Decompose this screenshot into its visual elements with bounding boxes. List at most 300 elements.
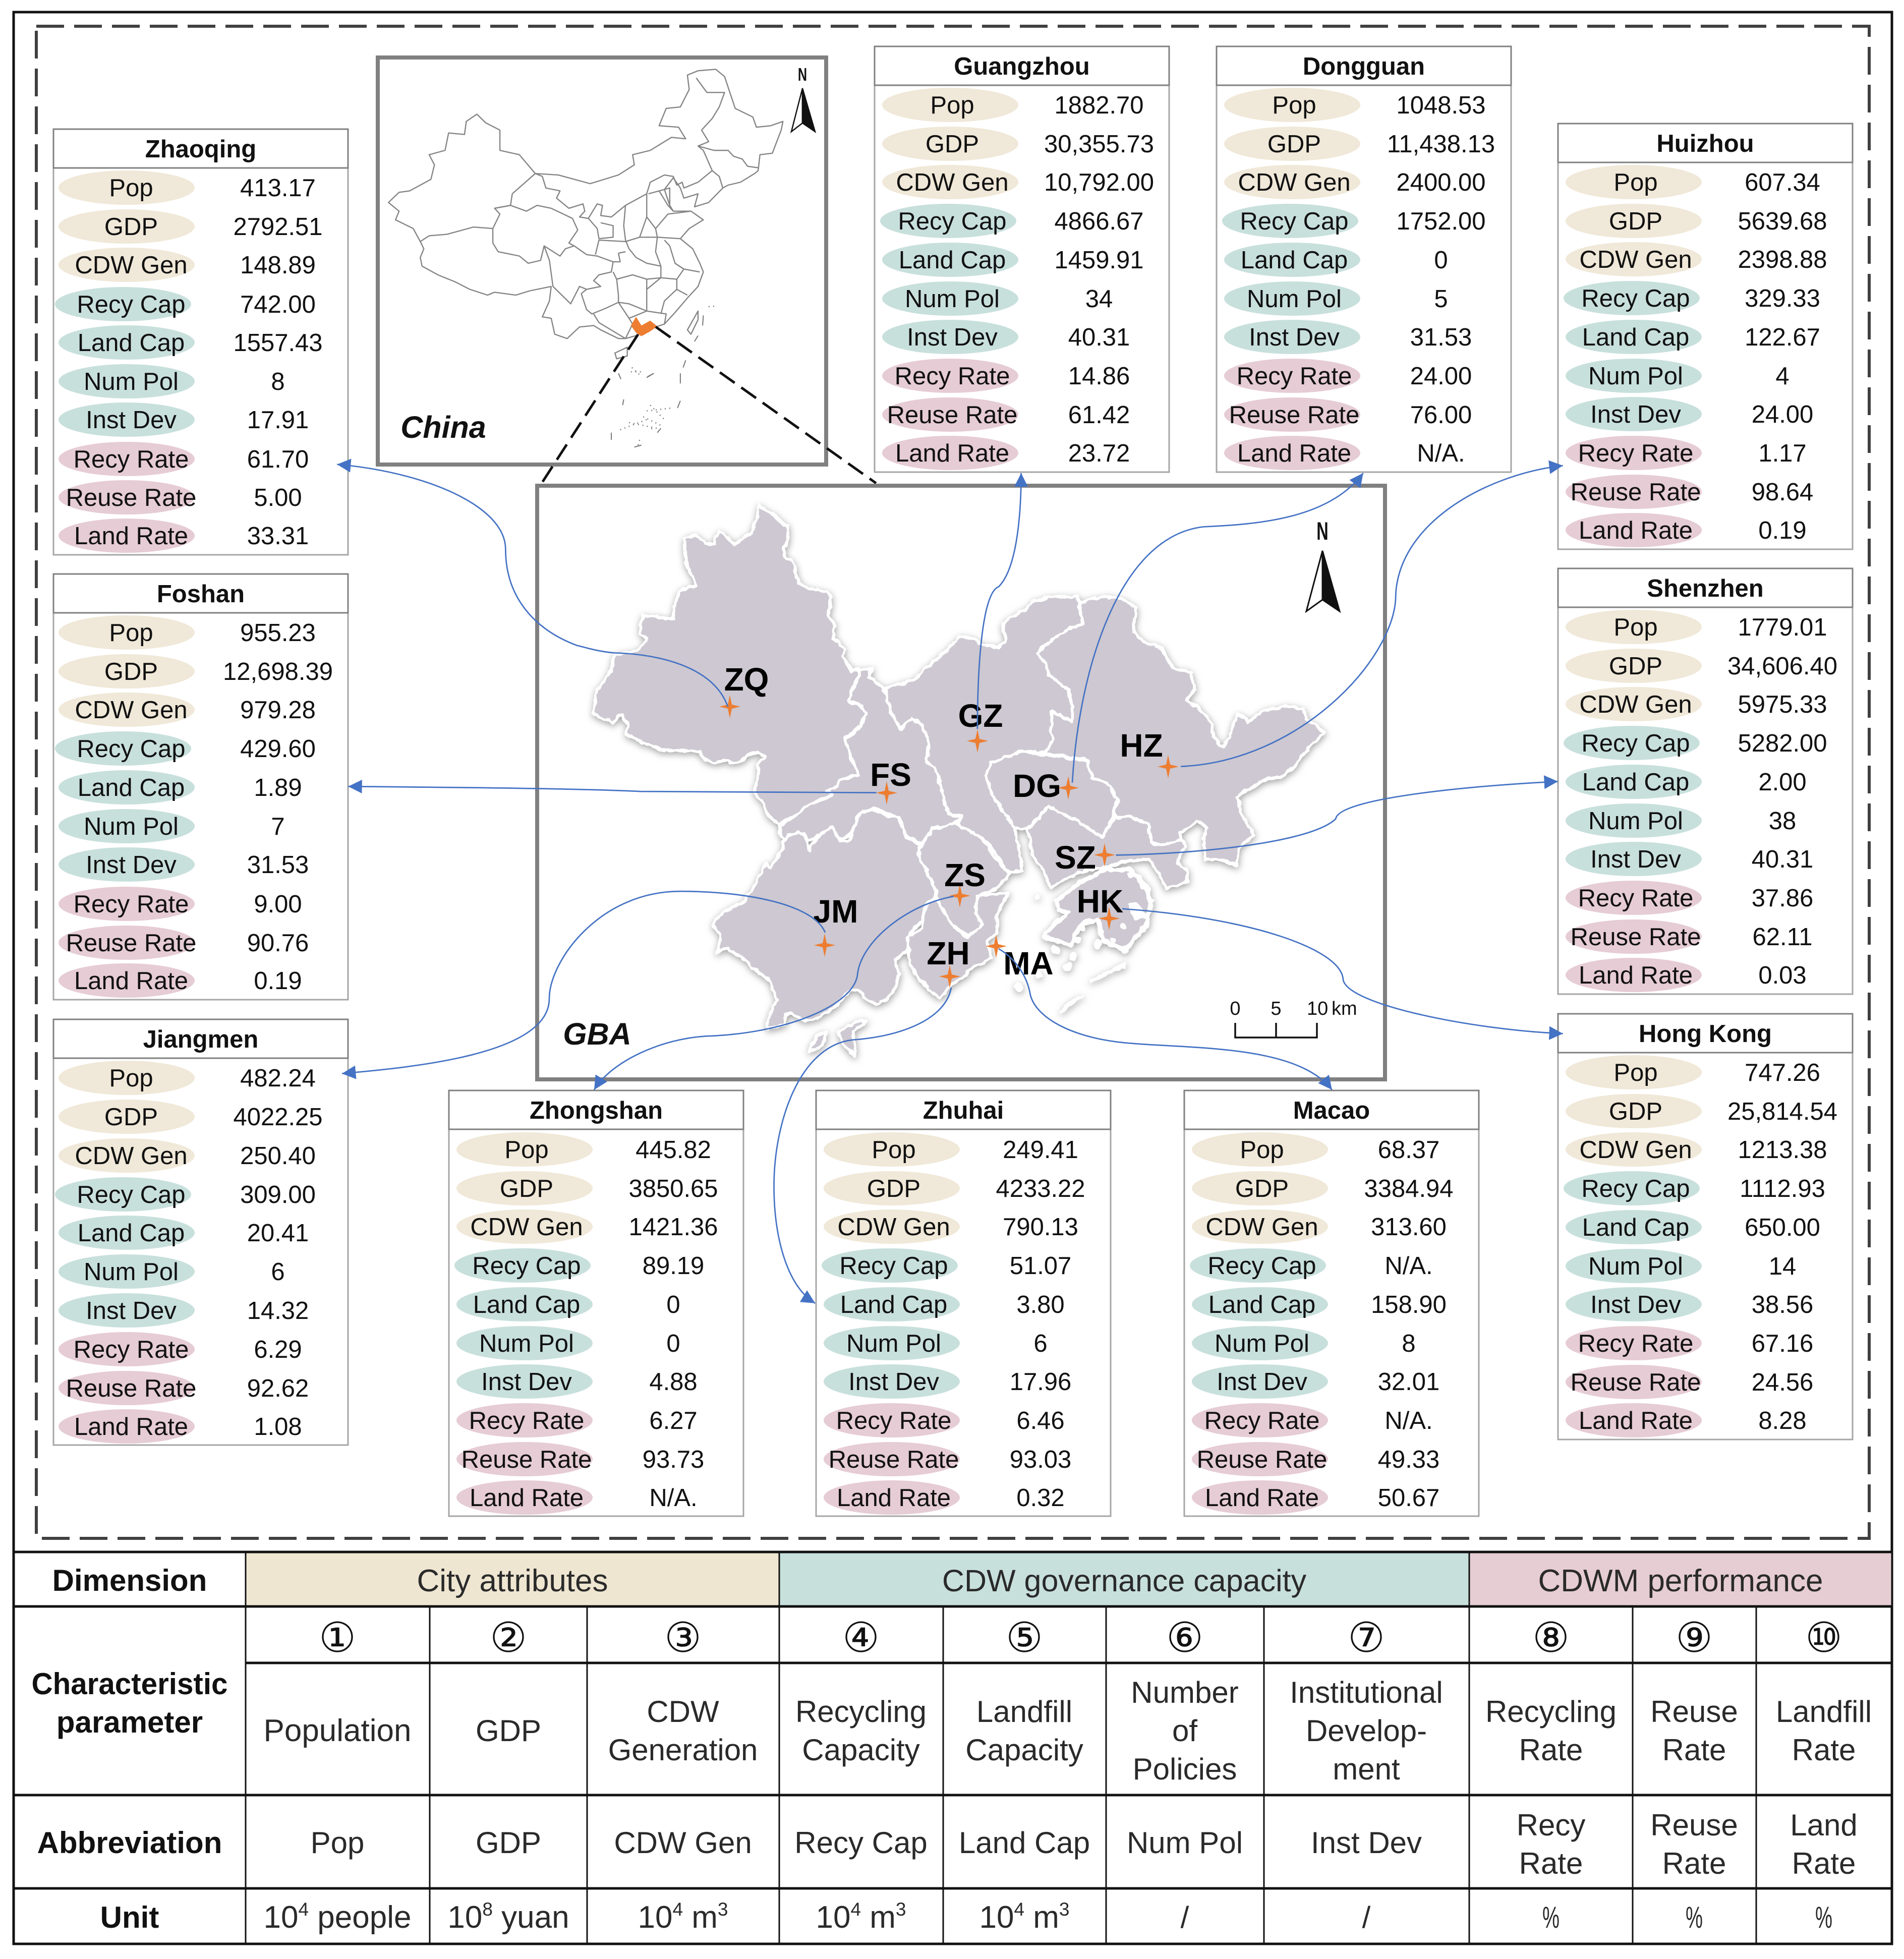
city code labels: SZ — [1055, 839, 1096, 876]
row: CDW Gen — [59, 693, 316, 727]
icon: north arrow (GBA): N — [1316, 517, 1329, 545]
city code labels: ZH — [927, 935, 970, 971]
heading: Hong Kong: Hong Kong — [1639, 1020, 1772, 1048]
row: Land Cap: Land Cap — [1241, 247, 1348, 274]
row: Inst Dev: 32.01 — [1378, 1368, 1439, 1396]
row: Recy Rate: Recy Rate — [469, 1407, 584, 1434]
city code labels — [724, 661, 1163, 982]
row: CDW Gen: CDW Gen — [75, 1142, 188, 1170]
heading: Shenzhen — [1558, 568, 1853, 607]
panel: China inset map — [378, 57, 826, 465]
row: Num Pol: 4 — [1775, 363, 1790, 390]
units — [264, 1899, 1832, 1935]
row: Inst Dev: 14.32 — [247, 1297, 309, 1324]
row: GDP: GDP — [1235, 1175, 1289, 1202]
row: Recy Rate: Recy Rate — [1578, 1330, 1693, 1357]
zoom-in dashed connector lines — [541, 327, 876, 485]
row: Inst Dev: 24.00 — [1752, 401, 1813, 428]
units: / — [1181, 1900, 1189, 1934]
row: GDP: GDP — [1609, 1098, 1662, 1125]
row: Reuse Rate: 62.11 — [1753, 924, 1812, 951]
row: Inst Dev: 38.56 — [1752, 1291, 1813, 1318]
row: Reuse Rate: 93.03 — [1010, 1446, 1071, 1473]
parameter names: Recycling — [1485, 1695, 1617, 1728]
row: Pop: Pop — [1240, 1136, 1284, 1164]
row: Recy Rate — [1566, 1326, 1813, 1360]
row: GDP — [456, 1171, 718, 1205]
row: Inst Dev: 17.96 — [1010, 1368, 1071, 1396]
row: Land Rate — [1192, 1480, 1439, 1515]
heading: Shenzhen: Shenzhen — [1647, 575, 1764, 602]
arrow: Guangzhou — [977, 473, 1021, 729]
row: Recy Cap: 4866.67 — [1054, 208, 1144, 235]
heading: Macao: Macao — [1293, 1097, 1370, 1124]
row: GDP: 34,606.40 — [1727, 653, 1837, 680]
region: Zhongshan — [918, 824, 1010, 937]
abbreviations: GDP — [476, 1826, 541, 1860]
parameter names: Rate — [1662, 1733, 1726, 1767]
units: 10 — [979, 1900, 1014, 1935]
row: CDW Gen: CDW Gen — [1205, 1214, 1318, 1241]
row: GDP: 11,438.13 — [1387, 131, 1495, 158]
row: Land Rate: N/A. — [649, 1484, 698, 1512]
row: GDP: GDP — [867, 1175, 920, 1202]
abbreviations: Reuse — [1650, 1808, 1738, 1842]
row: Reuse Rate: 61.42 — [1068, 401, 1130, 429]
row: CDW Gen: 2398.88 — [1738, 246, 1827, 273]
row: GDP: 4233.22 — [996, 1175, 1085, 1202]
abbreviations: Land Cap — [959, 1826, 1090, 1860]
row: Recy Rate — [1192, 1403, 1433, 1437]
row: Num Pol: Num Pol — [846, 1330, 941, 1357]
row: Land Rate: 0.19 — [254, 967, 302, 995]
row: Land Cap: 1459.91 — [1054, 247, 1144, 274]
heading: Zhaoqing — [53, 129, 348, 168]
row: GDP: GDP — [1609, 653, 1662, 680]
row: Land Rate: 33.31 — [247, 523, 309, 550]
row: Pop: Pop — [1613, 1059, 1658, 1086]
scale bar: 0 — [1230, 998, 1241, 1019]
region: Dongguan — [986, 751, 1118, 837]
parameter names: ment — [1333, 1752, 1400, 1786]
units: m — [683, 1900, 718, 1935]
region: Huizhou — [1038, 597, 1325, 866]
row: Land Rate: Land Rate — [74, 523, 188, 550]
row: Inst Dev — [1566, 842, 1813, 876]
parameter names — [263, 1676, 1872, 1786]
row: Land Cap: 650.00 — [1745, 1214, 1820, 1241]
row: CDW Gen — [1192, 1209, 1447, 1244]
row: Recy Rate: 14.86 — [1068, 363, 1130, 390]
parameter names: Reuse — [1650, 1695, 1738, 1728]
row: Reuse Rate: 5.00 — [254, 484, 302, 511]
row: Land Rate: 0.32 — [1016, 1484, 1065, 1512]
row: Recy Cap: N/A. — [1384, 1252, 1433, 1280]
panel: Zhaoqing table — [53, 129, 348, 555]
row: GDP — [59, 1100, 323, 1134]
row: Num Pol — [1566, 803, 1796, 838]
row: Inst Dev — [59, 847, 309, 882]
row: Recy Rate: Recy Rate — [74, 1336, 189, 1363]
row: Land Rate: N/A. — [1417, 440, 1465, 467]
row: Reuse Rate: 98.64 — [1752, 479, 1813, 506]
row: Inst Dev: Inst Dev — [1590, 401, 1681, 428]
row: Land Cap: 20.41 — [247, 1220, 309, 1247]
row: Pop: 445.82 — [636, 1136, 711, 1164]
row: CDW Gen: CDW Gen — [1238, 169, 1351, 196]
row: Reuse Rate — [1224, 397, 1472, 432]
row: Land Rate: 8.28 — [1758, 1407, 1807, 1434]
row: Recy Cap: Recy Cap — [77, 291, 186, 318]
abbreviations: Recy — [1517, 1808, 1585, 1842]
row: Pop: Pop — [1613, 169, 1658, 196]
units: 8 — [482, 1899, 493, 1920]
row: Num Pol — [824, 1326, 1048, 1360]
heading: Huizhou — [1558, 124, 1853, 162]
row: GDP: 30,355.73 — [1044, 131, 1154, 158]
row: Reuse Rate — [1566, 475, 1813, 509]
row: Num Pol: Num Pol — [84, 368, 179, 395]
row: Land Cap: 1557.43 — [233, 329, 323, 357]
row: Inst Dev: 17.91 — [247, 407, 309, 434]
row: Num Pol — [1566, 359, 1790, 393]
row: CDW Gen: CDW Gen — [75, 697, 188, 724]
offshore islands and Hong Kong fringe — [1014, 871, 1155, 1014]
row: Reuse Rate: Reuse Rate — [1197, 1446, 1327, 1473]
parameter names: Recycling — [795, 1695, 927, 1728]
row: Num Pol: 5 — [1434, 285, 1448, 313]
row: Recy Cap: 329.33 — [1745, 285, 1820, 312]
map of GBA cities — [593, 504, 1325, 1056]
row: Inst Dev: Inst Dev — [86, 1297, 177, 1324]
row: Reuse Rate: Reuse Rate — [1571, 924, 1701, 951]
dimension: CDW governance capacity: CDW governance capacity — [942, 1564, 1307, 1598]
row: CDW Gen: 250.40 — [240, 1142, 316, 1170]
heading: Foshan: Foshan — [157, 581, 245, 608]
row: Inst Dev: Inst Dev — [86, 851, 177, 879]
row: Pop: 1882.70 — [1054, 92, 1144, 119]
units: % — [1542, 1900, 1560, 1934]
city code labels: FS — [870, 757, 911, 793]
row: CDW Gen — [1224, 165, 1486, 199]
units: yuan — [493, 1900, 569, 1935]
row: GDP — [824, 1171, 1085, 1205]
row: Land Rate — [1224, 436, 1465, 470]
region: Zhaoqing — [593, 504, 867, 825]
row: Pop: Pop — [1272, 92, 1316, 119]
scale bar: 5 — [1271, 998, 1282, 1019]
row: Pop: 482.24 — [240, 1065, 316, 1092]
row: GDP — [1566, 649, 1837, 683]
dimension: CDWM performance: CDWM performance — [1538, 1564, 1823, 1598]
parameter numbers: ⑦ — [1348, 1614, 1385, 1662]
icon: north arrow (inset): N — [798, 65, 807, 85]
row: GDP: GDP — [1267, 131, 1321, 158]
row: Recy Rate: Recy Rate — [895, 363, 1010, 390]
row: Recy Rate — [59, 442, 309, 476]
row: Land Rate: Land Rate — [1579, 962, 1693, 989]
heading: Guangzhou: Guangzhou — [954, 53, 1090, 80]
row: Num Pol — [1566, 1249, 1796, 1283]
region: Foshan — [779, 669, 961, 844]
units: 3 — [1059, 1899, 1069, 1920]
row: Recy Cap: Recy Cap — [1240, 208, 1349, 235]
row: Land Rate: Land Rate — [1579, 1407, 1693, 1434]
row: Land Rate — [1566, 1403, 1807, 1437]
row: Land Rate: Land Rate — [895, 440, 1009, 467]
row: Inst Dev: 4.88 — [649, 1368, 698, 1396]
row: Num Pol — [59, 1254, 285, 1289]
row: CDW Gen: CDW Gen — [1579, 1136, 1692, 1164]
city code labels: ZS — [944, 857, 986, 893]
China provinces outline — [388, 69, 783, 447]
arrow: Hong Kong — [1122, 909, 1563, 1033]
row: Inst Dev: 31.53 — [247, 851, 309, 879]
row: Pop: Pop — [930, 92, 974, 119]
arrow: Huizhou — [1181, 466, 1563, 767]
row: CDW Gen — [824, 1209, 1078, 1244]
row: Inst Dev: 40.31 — [1752, 846, 1813, 873]
row: Num Pol — [1192, 1326, 1416, 1360]
row heading: Characteristic parameter: Characteristic — [31, 1667, 228, 1701]
row: GDP — [1566, 1094, 1837, 1128]
city code labels: DG — [1013, 768, 1061, 804]
row: GDP — [882, 127, 1154, 161]
row: Recy Cap: 5282.00 — [1738, 730, 1827, 757]
heading: Jiangmen: Jiangmen — [143, 1026, 258, 1053]
row: Num Pol: Num Pol — [1588, 1253, 1683, 1280]
parameter numbers: ② — [490, 1614, 527, 1662]
row: Land Rate — [824, 1480, 1065, 1515]
parameter names: Number — [1131, 1676, 1239, 1709]
abbreviations: Land — [1790, 1808, 1858, 1842]
row: Recy Rate — [824, 1403, 1065, 1437]
row: Reuse Rate — [1566, 919, 1812, 954]
row: Recy Cap — [55, 287, 316, 321]
heading: Zhongshan: Zhongshan — [530, 1097, 663, 1124]
abbreviations: Num Pol — [1127, 1826, 1243, 1860]
parameter names: Capacity — [802, 1733, 920, 1767]
icon: north arrow (inset) — [791, 65, 815, 132]
row: Recy Rate: 6.27 — [649, 1407, 698, 1434]
abbreviations: Rate — [1519, 1847, 1583, 1880]
row: Land Rate — [882, 436, 1130, 470]
row: Land Cap: 1.89 — [254, 774, 302, 801]
row: GDP — [59, 209, 323, 244]
row: Land Rate: Land Rate — [74, 1413, 188, 1441]
panel: Foshan table — [53, 574, 348, 1000]
row: CDW Gen — [456, 1209, 718, 1244]
units: 4 — [850, 1899, 861, 1920]
row: Reuse Rate — [59, 926, 309, 960]
row: Inst Dev — [59, 1293, 309, 1328]
row: Reuse Rate: Reuse Rate — [66, 484, 196, 511]
row: Recy Cap: Recy Cap — [839, 1252, 948, 1280]
units: 4 — [672, 1899, 683, 1920]
row: Reuse Rate: 93.73 — [643, 1446, 704, 1473]
row: Inst Dev: Inst Dev — [848, 1368, 939, 1396]
row: Reuse Rate — [456, 1442, 704, 1476]
parameter numbers: ③ — [664, 1614, 702, 1662]
row: Num Pol: 34 — [1085, 285, 1113, 313]
parameter numbers — [319, 1614, 1842, 1662]
row: CDW Gen — [1566, 687, 1827, 721]
city code labels: JM — [814, 893, 858, 930]
row: Inst Dev — [1566, 397, 1813, 431]
row: Num Pol: Num Pol — [479, 1330, 574, 1357]
row: GDP: 4022.25 — [233, 1104, 323, 1131]
row: Pop — [59, 1061, 316, 1095]
city code labels: ZQ — [724, 661, 769, 698]
row: Num Pol: Num Pol — [1247, 285, 1342, 313]
row: Reuse Rate — [59, 1371, 309, 1405]
parameter numbers: ⑩ — [1805, 1614, 1842, 1662]
row: Reuse Rate: 24.56 — [1752, 1369, 1813, 1396]
parameter names: Generation — [608, 1733, 758, 1767]
row: Land Rate — [1566, 513, 1807, 547]
row: Recy Cap — [822, 1248, 1071, 1283]
row: Recy Rate: Recy Rate — [1237, 363, 1352, 390]
row: Pop — [1566, 1055, 1820, 1089]
row: Recy Cap — [1564, 281, 1820, 315]
row: Reuse Rate: Reuse Rate — [887, 401, 1017, 429]
row: Recy Cap: 742.00 — [240, 291, 316, 318]
row: GDP: 3384.94 — [1364, 1175, 1454, 1202]
row: Pop — [1566, 610, 1827, 644]
row: Reuse Rate: Reuse Rate — [829, 1446, 959, 1473]
row heading: Dimension: Dimension — [52, 1564, 207, 1597]
row: Reuse Rate: Reuse Rate — [1571, 1369, 1701, 1396]
abbreviations: Inst Dev — [1311, 1826, 1422, 1860]
row: Pop — [59, 615, 316, 650]
row: CDW Gen — [59, 248, 316, 282]
row: Reuse Rate: 76.00 — [1410, 401, 1472, 429]
units: 3 — [718, 1899, 728, 1920]
row: Land Rate: Land Rate — [837, 1484, 951, 1512]
row: Recy Rate: 24.00 — [1410, 363, 1472, 390]
row: Recy Cap — [55, 1177, 316, 1212]
row: Num Pol: 8 — [271, 368, 285, 395]
parameter names: Landfill — [976, 1695, 1072, 1728]
row: CDW Gen: CDW Gen — [1579, 246, 1692, 273]
panel: Shenzhen table — [1558, 568, 1853, 994]
row: Pop: 1048.53 — [1396, 92, 1486, 119]
heading: Foshan — [53, 574, 348, 613]
row: Inst Dev — [882, 320, 1130, 354]
parameter numbers: ⑧ — [1532, 1614, 1570, 1662]
row: Num Pol: 7 — [271, 813, 285, 840]
units: 10 — [816, 1900, 850, 1935]
heading: Macao — [1184, 1090, 1479, 1129]
parameter names: Rate — [1792, 1733, 1856, 1767]
row: CDW Gen: 2400.00 — [1396, 169, 1486, 196]
row: Reuse Rate — [824, 1442, 1071, 1476]
row: Recy Cap — [454, 1248, 704, 1283]
row: CDW Gen: 790.13 — [1003, 1214, 1078, 1241]
heading: Huizhou: Huizhou — [1656, 130, 1754, 157]
row: GDP — [1566, 204, 1827, 238]
units: 10 — [638, 1900, 672, 1935]
panel: Zhuhai table — [816, 1090, 1111, 1516]
row: Inst Dev — [1224, 320, 1472, 354]
row: Num Pol: Num Pol — [1215, 1330, 1309, 1357]
row: CDW Gen: 10,792.00 — [1044, 169, 1154, 196]
row: GDP — [59, 654, 333, 688]
row heading: Unit: Unit — [100, 1900, 159, 1934]
row: Inst Dev — [59, 402, 309, 437]
row: Reuse Rate: 49.33 — [1378, 1446, 1439, 1473]
arrows from cities to data tables — [337, 465, 1563, 1303]
row: CDW Gen: 313.60 — [1371, 1214, 1447, 1241]
city code labels: GZ — [958, 698, 1003, 734]
row: CDW Gen: CDW Gen — [470, 1214, 583, 1241]
southern islands — [809, 1020, 866, 1056]
row: Inst Dev — [824, 1364, 1071, 1399]
region: Guangzhou — [884, 597, 1083, 872]
arrow: Zhuhai — [774, 988, 951, 1303]
row: GDP: GDP — [104, 1104, 158, 1131]
parameter names: GDP — [476, 1714, 541, 1748]
row: Recy Cap: 89.19 — [643, 1252, 704, 1280]
dimension: City attributes: City attributes — [417, 1564, 608, 1598]
row: Land Rate: 0.19 — [1758, 517, 1807, 544]
city code labels: MA — [1003, 945, 1054, 982]
row: GDP: GDP — [104, 658, 158, 685]
table grid — [14, 1552, 1892, 1944]
row: Pop: 68.37 — [1378, 1136, 1439, 1164]
parameter numbers: ④ — [842, 1614, 880, 1662]
row: GDP: 3850.65 — [628, 1175, 718, 1202]
row: Recy Rate: 37.86 — [1752, 885, 1813, 912]
row: Recy Rate — [1224, 359, 1472, 393]
parameter numbers: ⑤ — [1006, 1614, 1043, 1662]
units: 10 — [447, 1900, 482, 1935]
parameter names: Policies — [1133, 1752, 1237, 1786]
arrow: Foshan — [349, 786, 876, 793]
row: Recy Rate: 6.29 — [254, 1336, 302, 1363]
row: Num Pol: 14 — [1769, 1253, 1796, 1280]
row: Num Pol: Num Pol — [84, 813, 179, 840]
row: Pop: Pop — [109, 619, 153, 647]
row: Recy Cap: 309.00 — [240, 1181, 316, 1208]
row: Inst Dev: Inst Dev — [1217, 1368, 1307, 1396]
row: Land Rate: Land Rate — [1205, 1484, 1319, 1512]
panel: Dongguan table — [1217, 46, 1511, 472]
row: CDW Gen — [59, 1138, 316, 1173]
row: CDW Gen: 5975.33 — [1738, 691, 1827, 718]
parameter names: Institutional — [1290, 1676, 1443, 1709]
row: Recy Cap: Recy Cap — [898, 208, 1007, 235]
row: Reuse Rate: 92.62 — [247, 1375, 309, 1402]
row: Land Cap — [824, 1287, 1065, 1321]
row: Land Cap — [1224, 243, 1448, 277]
row: Pop — [882, 88, 1144, 122]
row: Num Pol: 8 — [1402, 1330, 1416, 1357]
row: Land Cap: 3.80 — [1016, 1291, 1065, 1318]
row: Reuse Rate — [59, 480, 302, 514]
heading: Jiangmen — [53, 1019, 348, 1058]
row: Land Cap: Land Cap — [78, 774, 185, 801]
row: GDP: GDP — [926, 131, 979, 158]
abbreviations: Pop — [311, 1826, 364, 1860]
row: Land Cap: Land Cap — [1208, 1291, 1315, 1318]
label: GBA: GBA — [563, 1017, 631, 1051]
row: Land Rate: Land Rate — [74, 967, 188, 995]
panel: Huizhou table — [1558, 124, 1853, 549]
row: Inst Dev: Inst Dev — [86, 407, 177, 434]
row: GDP — [1224, 127, 1495, 161]
arrow: Jiangmen — [342, 891, 825, 1073]
